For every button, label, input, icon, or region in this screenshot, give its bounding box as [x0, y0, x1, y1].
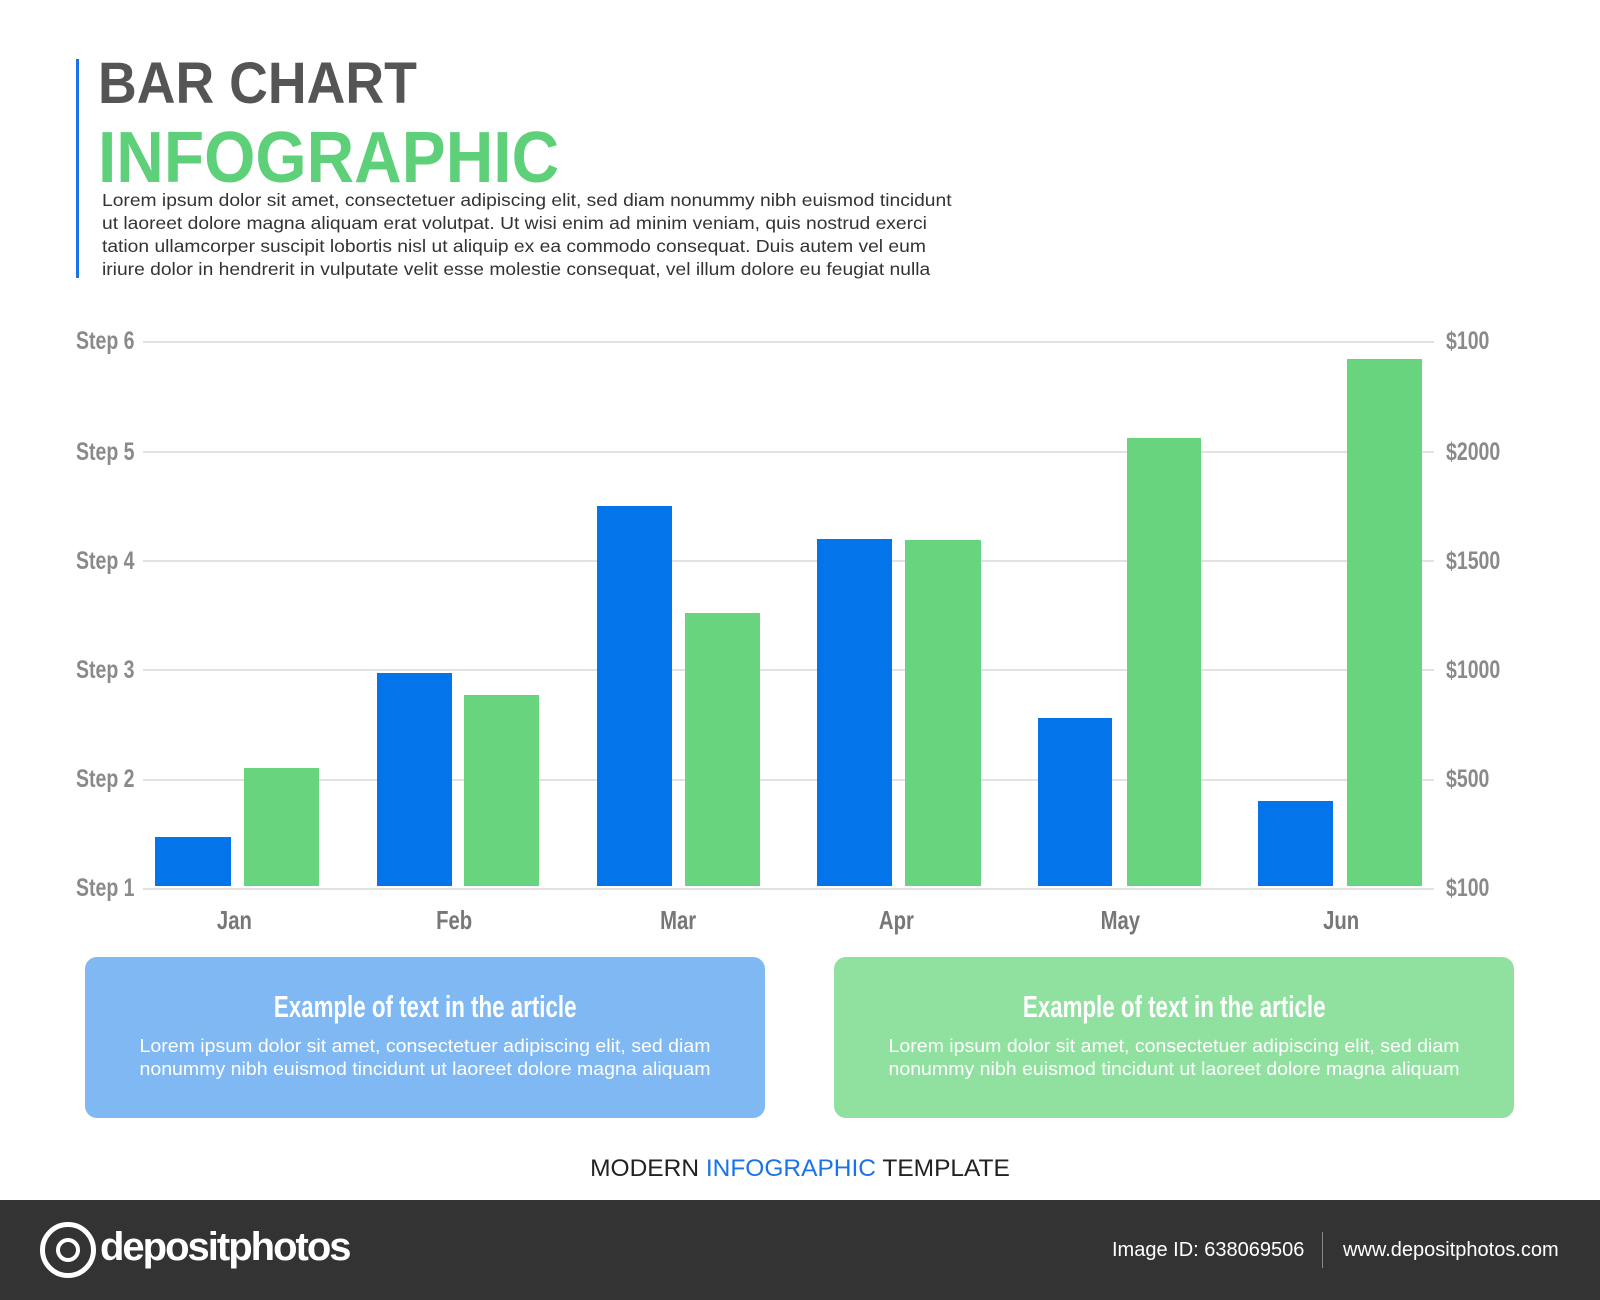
- bar chart: $500: [1446, 765, 1489, 793]
- title: [98, 51, 559, 198]
- image id: Image ID: 638069506: [1112, 1239, 1304, 1261]
- bar chart: $1000: [1446, 656, 1500, 684]
- panel: green text box: Lorem ipsum dolor sit amet, consectetuer adipiscing elit, sed diam: [889, 1036, 1459, 1056]
- bar chart: Jun: [1323, 905, 1359, 935]
- intro text: iriure dolor in hendrerit in vulputate velit esse molestie consequat, vel illum dolore eu feugiat nulla: [102, 259, 930, 279]
- panel: green text box: nonummy nibh euismod tincidunt ut laoreet dolore magna aliquam: [888, 1059, 1460, 1079]
- bar chart: $1500: [1446, 547, 1500, 575]
- watermark bar: [0, 1200, 1600, 1300]
- icon: logo camera: [40, 1222, 96, 1278]
- panel: blue text box: Example of text in the article: [274, 989, 576, 1024]
- footer caption: MODERN INFOGRAPHIC TEMPLATE: [590, 1155, 1010, 1182]
- accent line: [76, 59, 79, 278]
- logo text: depositphotos: [100, 1225, 350, 1269]
- panel: blue text box: [85, 957, 765, 1118]
- panel: green text box: Example of text in the article: [1023, 989, 1325, 1024]
- bar chart: Step 2: [76, 765, 135, 793]
- bar chart: Feb: [436, 905, 472, 935]
- title: BAR CHART: [98, 51, 417, 116]
- bar chart: Jan: [217, 905, 251, 935]
- bar chart: $100: [1446, 874, 1489, 902]
- title: INFOGRAPHIC: [98, 118, 559, 198]
- bar chart: Apr: [879, 905, 913, 935]
- bar chart: Step 1: [76, 874, 135, 902]
- bar chart: Mar: [660, 905, 696, 935]
- bar chart: May: [1100, 905, 1140, 935]
- bar chart: Step 4: [76, 547, 135, 575]
- site url: www.depositphotos.com: [1343, 1239, 1559, 1261]
- bar chart: Step 5: [76, 438, 135, 466]
- intro text: [102, 190, 952, 279]
- intro text: ut laoreet dolore magna aliquam erat volutpat. Ut wisi enim ad minim veniam, quis nostrud exerci: [102, 213, 927, 233]
- bar chart: Step 3: [76, 656, 135, 684]
- bar chart: $100: [1446, 327, 1489, 355]
- bar chart: Step 6: [76, 327, 135, 355]
- bar chart: [76, 327, 1500, 935]
- panel: blue text box: Lorem ipsum dolor sit amet, consectetuer adipiscing elit, sed diam: [140, 1036, 710, 1056]
- bar chart: $2000: [1446, 438, 1500, 466]
- intro text: Lorem ipsum dolor sit amet, consectetuer adipiscing elit, sed diam nonummy nibh euismod tincidunt: [102, 190, 952, 210]
- panel: blue text box: nonummy nibh euismod tincidunt ut laoreet dolore magna aliquam: [139, 1059, 711, 1079]
- intro text: tation ullamcorper suscipit lobortis nisl ut aliquip ex ea commodo consequat. Duis autem vel eum: [102, 236, 926, 256]
- panel: green text box: [834, 957, 1514, 1118]
